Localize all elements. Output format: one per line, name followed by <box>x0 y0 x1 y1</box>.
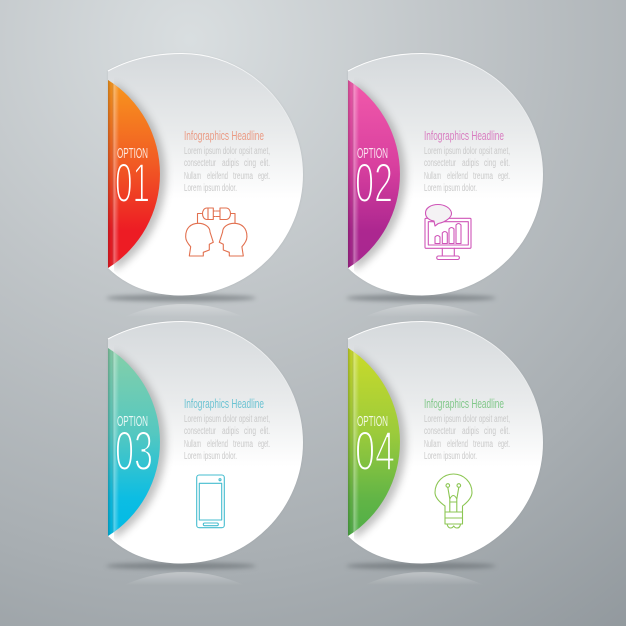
body text: Nullam <box>184 171 201 182</box>
option label: OPTION <box>117 413 148 430</box>
body text: eleifend <box>447 439 468 450</box>
body text: treuma <box>473 439 493 450</box>
body text: elit. <box>500 426 510 437</box>
band <box>348 80 406 271</box>
body text <box>184 146 270 194</box>
floor shadow <box>106 562 256 585</box>
band <box>108 80 166 271</box>
icon: heads with plug <box>186 208 247 256</box>
body text: adipis <box>222 158 239 169</box>
icon: monitor with speech bubble <box>425 204 471 260</box>
body text: cing <box>484 158 496 169</box>
band <box>348 348 406 539</box>
option label: OPTION <box>357 145 388 162</box>
body text: treuma <box>233 171 253 182</box>
body text: elit. <box>260 426 270 437</box>
body text: consectetur <box>424 158 456 169</box>
body text <box>424 146 510 194</box>
body text: Lorem ipsum dolor. <box>424 451 477 462</box>
body text: treuma <box>473 171 493 182</box>
panel: option 03 <box>106 322 303 585</box>
option label: OPTION <box>357 413 388 430</box>
body text: elit. <box>500 158 510 169</box>
body text: adipis <box>462 426 479 437</box>
body text: eget. <box>498 439 510 450</box>
option label: OPTION <box>117 145 148 162</box>
body text: cing <box>484 426 496 437</box>
number: 02 <box>355 151 393 214</box>
floor shadow <box>106 294 256 317</box>
number: 01 <box>115 151 150 214</box>
icon: smartphone <box>197 475 224 528</box>
panel: option 02 <box>346 54 543 317</box>
body text: treuma <box>233 439 253 450</box>
body text: consectetur <box>424 426 456 437</box>
headline: Infographics Headline <box>424 397 504 411</box>
body text: Lorem ipsum dolor. <box>184 451 237 462</box>
card <box>348 54 543 296</box>
body text: eleifend <box>447 171 468 182</box>
body text: Lorem ipsum dolor opsit amet, <box>184 146 270 157</box>
floor shadow <box>346 294 496 317</box>
body text: Lorem ipsum dolor opsit amet, <box>424 146 510 157</box>
body text: Nullam <box>424 439 441 450</box>
body text: eget. <box>498 171 510 182</box>
number: 03 <box>115 419 153 482</box>
number: 04 <box>355 419 395 482</box>
body text: cing <box>244 158 256 169</box>
card <box>108 322 303 564</box>
body text: cing <box>244 426 256 437</box>
panel: option 04 <box>346 322 543 585</box>
body text: Nullam <box>184 439 201 450</box>
body text: adipis <box>462 158 479 169</box>
panel: option 01 <box>106 54 303 317</box>
card <box>348 322 543 564</box>
body text: Lorem ipsum dolor. <box>184 183 237 194</box>
body text: Lorem ipsum dolor. <box>424 183 477 194</box>
headline: Infographics Headline <box>184 129 264 143</box>
body text: Nullam <box>424 171 441 182</box>
body text: consectetur <box>184 426 216 437</box>
body text: eleifend <box>207 171 228 182</box>
body text: Lorem ipsum dolor opsit amet, <box>424 414 510 425</box>
headline: Infographics Headline <box>424 129 504 143</box>
body text: adipis <box>222 426 239 437</box>
floor shadow <box>346 562 496 585</box>
band <box>108 348 166 539</box>
body text: eget. <box>258 439 270 450</box>
headline: Infographics Headline <box>184 397 264 411</box>
body text: eleifend <box>207 439 228 450</box>
icon: light bulb <box>435 474 472 528</box>
body text <box>184 414 270 462</box>
body text: eget. <box>258 171 270 182</box>
body text <box>424 414 510 462</box>
card <box>108 54 303 296</box>
body text: elit. <box>260 158 270 169</box>
body text: Lorem ipsum dolor opsit amet, <box>184 414 270 425</box>
body text: consectetur <box>184 158 216 169</box>
